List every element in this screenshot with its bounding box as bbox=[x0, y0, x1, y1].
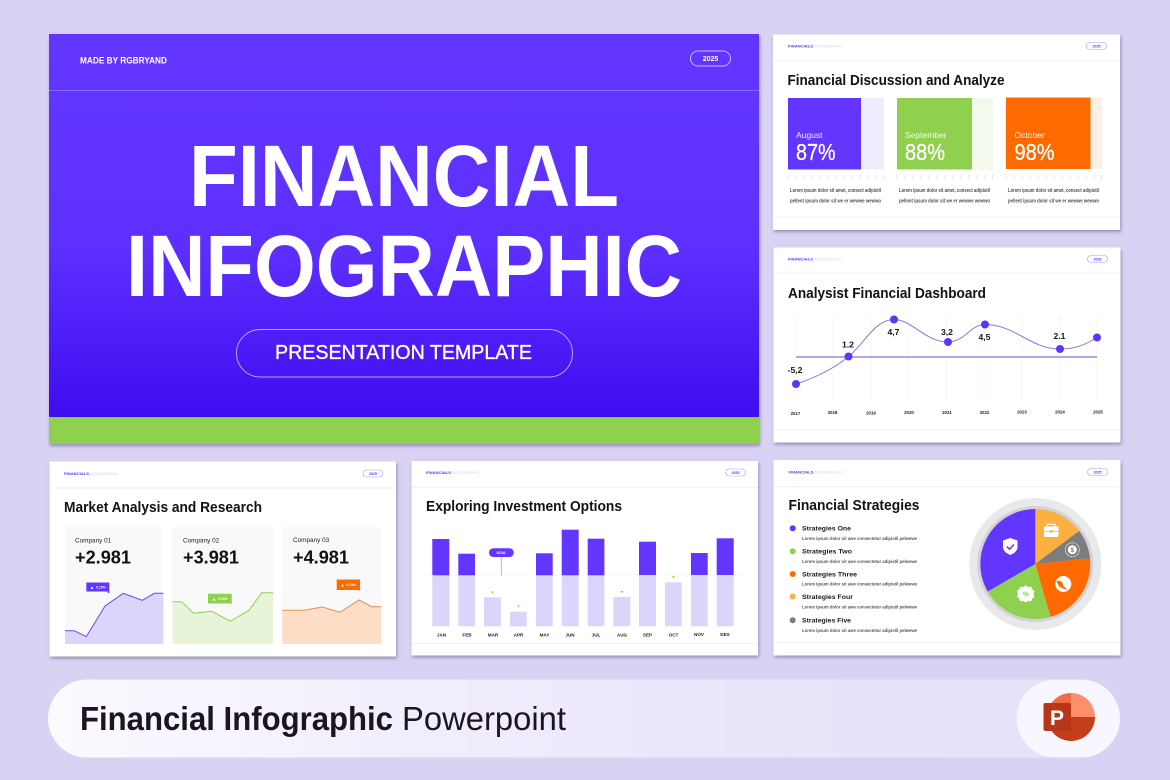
goal marker: GOAL bbox=[496, 551, 506, 555]
line chart: 1.2 bbox=[842, 340, 854, 350]
card: company 02 bbox=[172, 527, 273, 644]
slide header: FINANCIALS bbox=[788, 470, 814, 474]
cover title: INFOGRAPHIC bbox=[126, 218, 682, 315]
card descriptions bbox=[790, 188, 1100, 204]
cover subtitle pill: PRESENTATION TEMPLATE bbox=[275, 342, 532, 364]
card: company 01 bbox=[65, 527, 163, 644]
tag: 0.15% bbox=[218, 597, 228, 601]
legend: Strategies Four bbox=[802, 594, 853, 601]
line chart: 4,7 bbox=[888, 327, 900, 337]
line chart: 3,2 bbox=[941, 327, 953, 337]
card: August 87%: 87% bbox=[796, 139, 836, 165]
legend: Strategies Three bbox=[802, 571, 857, 578]
bar chart bbox=[424, 530, 745, 638]
bar chart: JAN bbox=[437, 632, 447, 638]
cover credit text: MADE BY RGBRYAND bbox=[80, 56, 167, 66]
panel: analyst dashboard bbox=[774, 248, 1120, 442]
card: October 98%: October bbox=[1014, 130, 1045, 140]
panel: market analysis bbox=[50, 462, 396, 656]
icon: globe bbox=[1055, 576, 1071, 592]
line chart: 2025 bbox=[1093, 410, 1103, 414]
panel: main cover slide bbox=[49, 34, 759, 444]
bar chart: DES bbox=[720, 632, 730, 637]
bar chart: JUN bbox=[565, 632, 575, 638]
card: September 88%: 88% bbox=[905, 139, 945, 165]
legend: Strategies Five bbox=[802, 618, 851, 625]
card descriptions: Lorem ipsum dolor sit amet, consect adipistil bbox=[1008, 188, 1100, 194]
cover subtitle pill bbox=[236, 330, 572, 377]
goal marker bbox=[489, 548, 514, 575]
icon: shield bbox=[1003, 538, 1018, 555]
line chart: 2017 bbox=[791, 411, 801, 416]
line chart: 2.1 bbox=[1054, 331, 1066, 341]
slide header: INFOGRAPHIC bbox=[814, 256, 842, 262]
legend: Strategies One bbox=[802, 526, 851, 532]
card descriptions: pellent ipsum dolor sit we er wewwe wewwo bbox=[1008, 198, 1099, 204]
card descriptions: Lorem ipsum dolor sit amet, consect adipistil bbox=[899, 188, 991, 194]
slide header bbox=[788, 42, 1106, 50]
pie chart bbox=[969, 498, 1101, 630]
tag: 0.15% bbox=[346, 583, 356, 587]
panel: financial strategies bbox=[774, 460, 1120, 656]
cover year badge bbox=[690, 51, 730, 66]
legend: Lorem ipsum dolor sit awe consectetur adipistil pelwewe bbox=[802, 559, 917, 564]
heading: Exploring Investment Options bbox=[426, 499, 622, 515]
icon: powerpoint logo: P bbox=[1050, 707, 1064, 730]
bar chart: JUL bbox=[592, 632, 601, 638]
legend: Strategies Two bbox=[802, 548, 852, 556]
slide header: 2025 bbox=[732, 471, 740, 475]
bar chart: MAR bbox=[488, 632, 499, 638]
heading: Analysist Financial Dashboard bbox=[788, 286, 986, 302]
growth markers bbox=[491, 576, 675, 608]
icon: dollar coin: $ bbox=[1070, 547, 1074, 554]
line chart: 2021 bbox=[942, 410, 952, 415]
slide header: INFOGRAPHIC bbox=[814, 44, 842, 48]
slide header: FINANCIALS bbox=[788, 44, 813, 48]
card: company 03: Company 03 bbox=[293, 537, 330, 544]
slide header: FINANCIALS bbox=[788, 256, 813, 262]
card: August 87% bbox=[788, 98, 884, 170]
bar chart: APR bbox=[514, 632, 524, 638]
card: company 02: Company 02 bbox=[183, 538, 220, 544]
line chart: 2018 bbox=[828, 410, 838, 415]
card: September 88%: September bbox=[905, 130, 947, 140]
bar chart: AUG bbox=[617, 632, 628, 638]
card: October 98%: 98% bbox=[1014, 139, 1054, 165]
panel: financial discussion bbox=[773, 34, 1120, 230]
slide header: 2025 bbox=[1094, 257, 1102, 261]
card descriptions: pellent ipsum dolor sit we er wewwe wewwo bbox=[790, 198, 881, 204]
bar chart: FEB bbox=[462, 632, 472, 638]
tick marks bbox=[788, 174, 1102, 180]
card: company 01: +2.981 bbox=[75, 546, 131, 568]
slide header: FINANCIALS bbox=[426, 470, 451, 475]
card: September 88% bbox=[897, 98, 993, 170]
bar chart: NOV bbox=[694, 632, 705, 637]
cover title bbox=[126, 128, 682, 315]
icon: percent badge: % bbox=[1023, 592, 1030, 598]
bar title: Financial Infographic bbox=[80, 700, 393, 737]
bottom title bar bbox=[48, 680, 1120, 758]
card: October 98% bbox=[1006, 98, 1102, 169]
heading: Financial Strategies bbox=[788, 498, 920, 514]
bar chart: MAY bbox=[540, 632, 549, 638]
line chart: 2019 bbox=[866, 410, 876, 416]
card: company 01: Company 01 bbox=[75, 538, 112, 544]
slide header: 2025 bbox=[1094, 470, 1102, 474]
bar subtitle: Powerpoint bbox=[402, 700, 566, 737]
slide header bbox=[64, 470, 383, 477]
card: company 03 bbox=[282, 527, 381, 644]
heading: Financial Discussion and Analyze bbox=[788, 73, 1004, 89]
icon: powerpoint logo bbox=[1016, 680, 1120, 758]
slide header: INFOGRAPHIC bbox=[90, 471, 118, 476]
slide header: 2025 bbox=[369, 472, 377, 476]
legend: Lorem ipsum dolor sit awe consectetur adipistil pelwewe bbox=[802, 628, 917, 633]
line chart: 2020 bbox=[904, 410, 914, 415]
line chart: 4,5 bbox=[979, 332, 991, 342]
slide header bbox=[788, 468, 1108, 476]
slide header bbox=[788, 256, 1108, 262]
legend bbox=[790, 525, 917, 633]
bar chart: SEP bbox=[643, 632, 652, 638]
line chart: 2024 bbox=[1055, 410, 1065, 414]
card: August 87%: August bbox=[796, 130, 823, 140]
legend: Lorem ipsum dolor sit awe consectetur adipistil pelwewe bbox=[802, 604, 917, 610]
tag: 0.15% bbox=[96, 586, 106, 590]
slide header bbox=[426, 469, 746, 476]
cover title: FINANCIAL bbox=[189, 128, 619, 225]
cover year badge: 2025 bbox=[703, 56, 718, 63]
heading: Market Analysis and Research bbox=[64, 500, 262, 516]
line chart: 2022 bbox=[980, 410, 990, 415]
line chart: 2023 bbox=[1017, 410, 1027, 414]
line chart: -5,2 bbox=[788, 365, 803, 375]
card: company 02: +3.981 bbox=[183, 546, 239, 568]
bar chart: OCT bbox=[669, 632, 679, 638]
line chart bbox=[788, 315, 1103, 416]
card: company 03: +4.981 bbox=[293, 546, 349, 568]
icon: briefcase bbox=[1044, 524, 1058, 537]
slide header: FINANCIALS bbox=[64, 471, 89, 476]
card descriptions: Lorem ipsum dolor sit amet, consect adipistil bbox=[790, 188, 882, 194]
slide header: INFOGRAPHIC bbox=[452, 470, 480, 475]
legend: Lorem ipsum dolor sit awe consectetur adipistil pelwewe bbox=[802, 582, 917, 586]
card descriptions: pellent ipsum dolor sit we er wewwe wewwo bbox=[899, 198, 990, 204]
legend: Lorem ipsum dolor sit awe consectetur adipistil pelwewe bbox=[802, 536, 917, 541]
slide header: 2025 bbox=[1092, 44, 1100, 48]
slide header: INFOGRAPHIC bbox=[814, 470, 843, 474]
panel: investment options bbox=[412, 461, 758, 656]
